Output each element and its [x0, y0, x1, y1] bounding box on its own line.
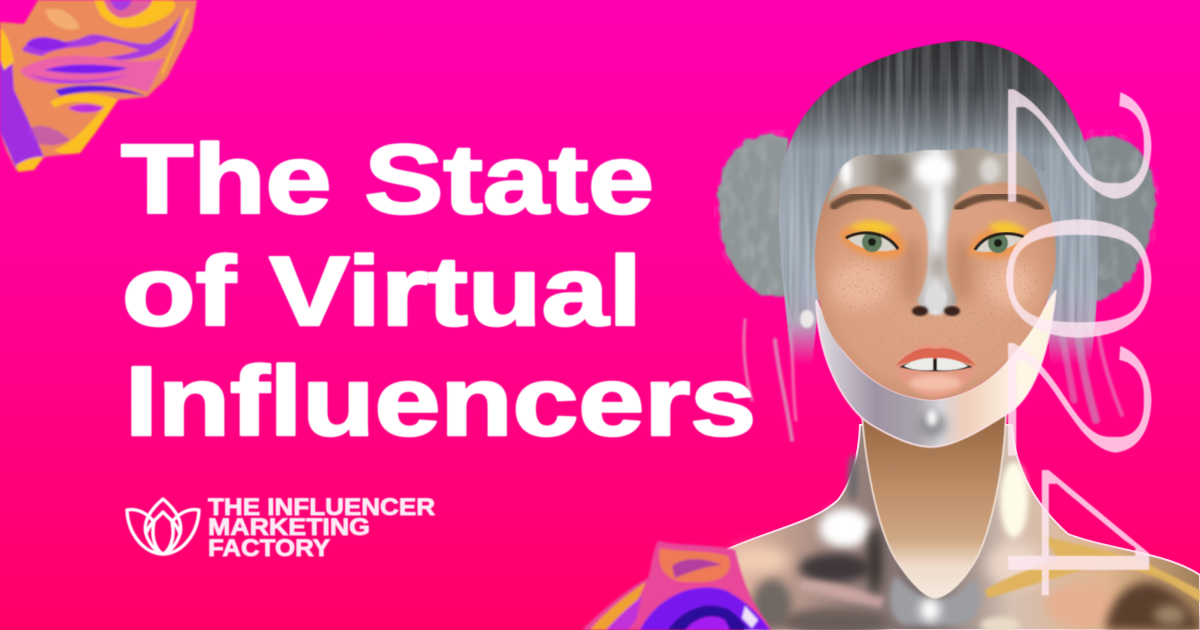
year 2024 vertical: 2024	[957, 72, 1199, 607]
decorative liquid shape: bottom shoulder	[582, 541, 772, 630]
neck	[862, 415, 1006, 598]
earring	[800, 310, 814, 328]
eye makeup right	[968, 222, 1032, 258]
hair back layer	[775, 38, 1105, 365]
hair buns	[712, 128, 1162, 306]
nose highlight	[925, 286, 947, 310]
brand name	[208, 494, 435, 562]
title line 3: Influencers	[125, 346, 756, 456]
figure: virtual influencer portrait	[712, 38, 1200, 630]
brand name: MARKETING	[208, 514, 370, 541]
eyebrows	[834, 196, 1040, 208]
title line 2: of Virtual	[122, 236, 642, 346]
decorative liquid shape: top left	[0, 0, 197, 172]
mouth	[895, 344, 977, 397]
nostrils	[912, 306, 960, 316]
title	[121, 124, 756, 456]
forehead and nose chrome	[826, 146, 1046, 315]
brand name: THE INFLUENCER	[208, 494, 435, 521]
logo: The Influencer Marketing Factory	[127, 494, 435, 562]
hair fringe	[818, 40, 1055, 190]
loose hair strands	[744, 320, 1122, 440]
eye left	[846, 232, 898, 252]
eye makeup left	[838, 221, 905, 259]
chrome jaw	[816, 290, 1056, 447]
icon: lotus	[127, 499, 199, 554]
shoulders and chrome chest	[728, 425, 1200, 630]
brand name: FACTORY	[208, 535, 330, 562]
skin of face	[815, 165, 1056, 400]
title line 1: The State	[121, 124, 654, 234]
eye right	[975, 233, 1024, 253]
